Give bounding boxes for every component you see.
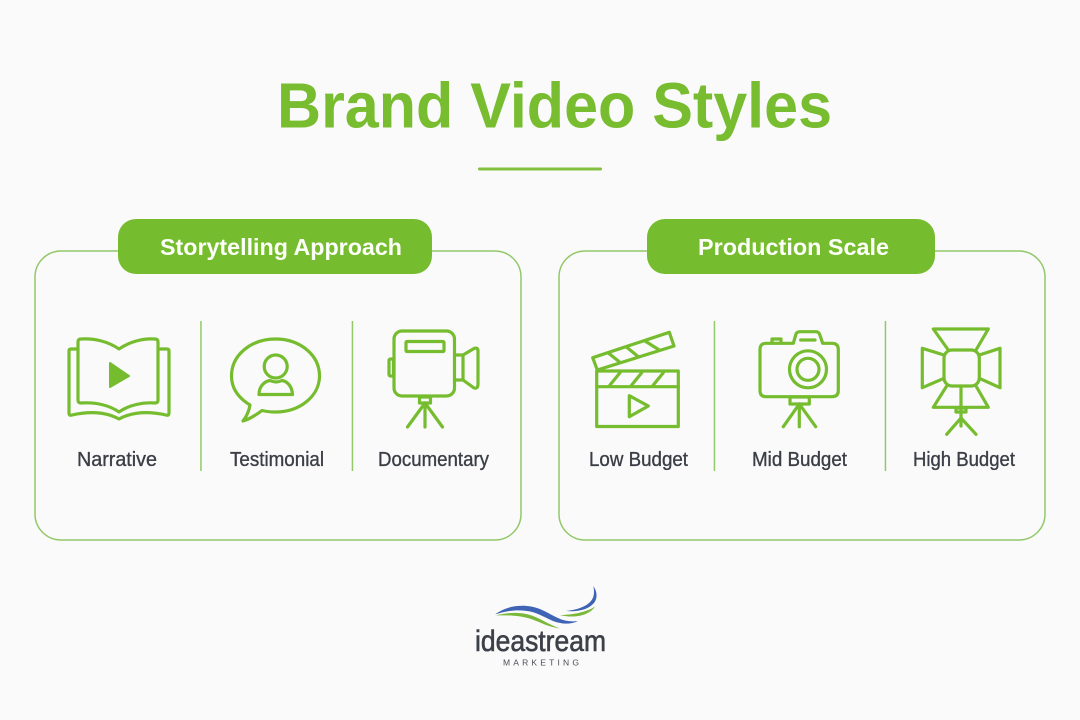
label: narrative: Narrative (77, 449, 157, 471)
icon: video camera on tripod (389, 331, 478, 427)
heading pill: production scale (647, 219, 935, 274)
label: testimonial: Testimonial (230, 449, 324, 471)
heading pill: production scale: Production Scale (698, 234, 889, 260)
label: high budget: High Budget (913, 449, 1015, 471)
heading pill: storytelling approach: Storytelling Approach (160, 234, 402, 260)
icon: studio light with barn doors (922, 329, 1000, 434)
logo tagline: MARKETING (503, 658, 579, 668)
label: low budget: Low Budget (589, 449, 688, 471)
logo mark: waves (495, 586, 597, 628)
label: documentary: Documentary (378, 449, 489, 471)
title: Brand Video Styles (277, 70, 832, 142)
icon: speech bubble with person (232, 339, 320, 421)
logo: ideastream marketing (475, 586, 606, 668)
logo wordmark: ideastream (475, 625, 606, 658)
label: mid budget: Mid Budget (752, 449, 847, 471)
icon: clapperboard (593, 332, 678, 426)
heading pill: storytelling approach (118, 219, 432, 274)
panel: storytelling approach (35, 219, 521, 540)
panel: production scale (559, 219, 1045, 540)
icon: open book with play button (69, 339, 169, 419)
icon: photo camera on tripod (760, 332, 838, 427)
